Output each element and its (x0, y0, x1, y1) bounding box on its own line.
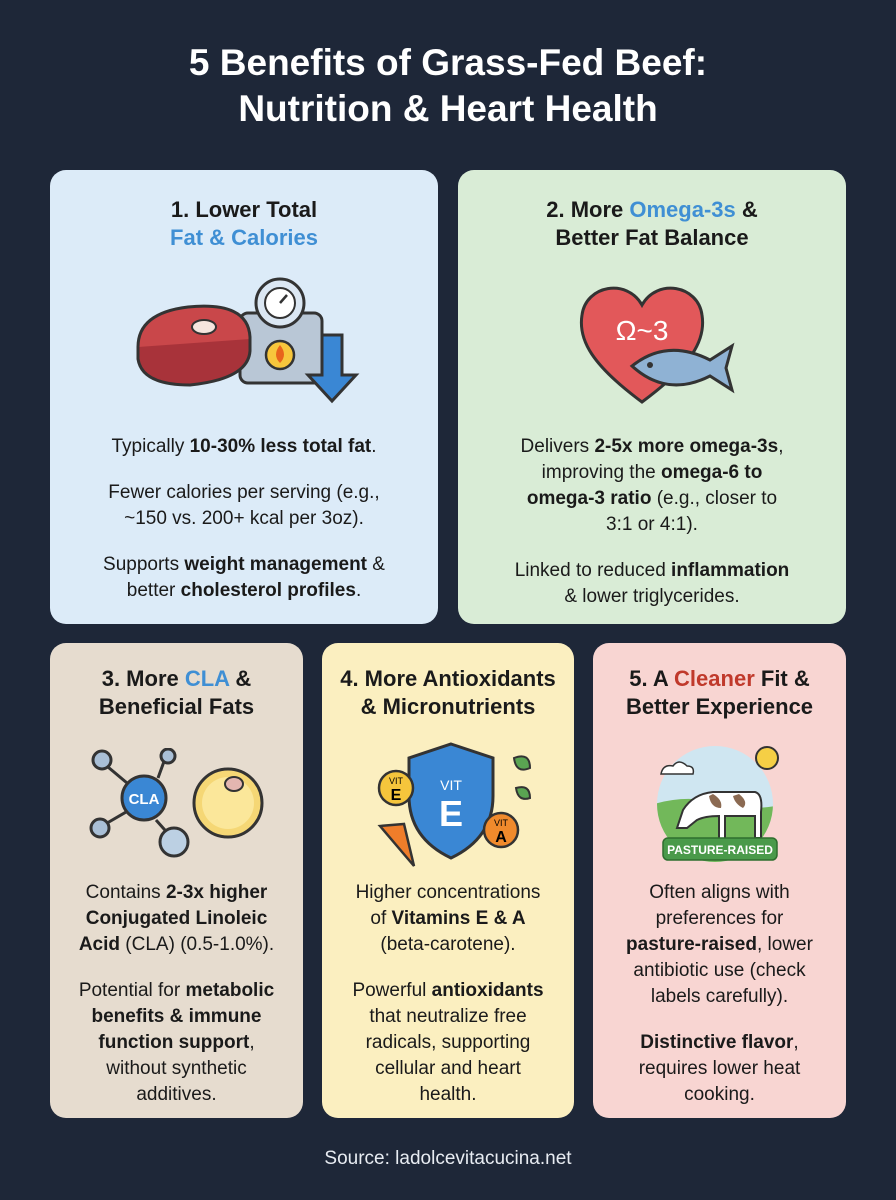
text block 1: ~150 vs. 200+ kcal per 3oz). (124, 508, 364, 529)
text block 1: better cholesterol profiles. (127, 580, 361, 601)
text block 1 (103, 436, 385, 601)
text block 5: pasture-raised, lower (626, 934, 813, 955)
text block 2 (515, 436, 789, 607)
text block 3: without synthetic (106, 1058, 247, 1079)
source: Source: ladolcevitacucina.net (324, 1148, 572, 1169)
panel: CLA (50, 643, 303, 1118)
text block 5: requires lower heat (639, 1058, 800, 1079)
icon: vitamin shield: VIT (440, 777, 462, 793)
heading 5: Better Experience (626, 694, 813, 719)
title: Nutrition & Heart Health (238, 88, 658, 129)
text block 5: preferences for (656, 908, 783, 929)
panel: cleaner fit (593, 643, 846, 1118)
text block 4: health. (419, 1084, 477, 1105)
heading 4: & Micronutrients (361, 694, 535, 719)
heading 2 (546, 197, 758, 250)
heading 2: Better Fat Balance (555, 225, 749, 250)
text block 4: Higher concentrations (356, 882, 540, 903)
icon: CLA molecule (90, 748, 264, 858)
text block 2: Delivers 2-5x more omega-3s, (521, 436, 783, 457)
icon: heart with fish (580, 286, 734, 404)
text block 3: additives. (136, 1084, 217, 1105)
panel: antioxidants (322, 643, 574, 1118)
title: 5 Benefits of Grass-Fed Beef: (189, 42, 707, 83)
icon: vitamin shield: VIT (389, 776, 403, 786)
panel: lower fat (50, 170, 438, 624)
text block 2: Linked to reduced inflammation (515, 560, 789, 581)
text block 3: Conjugated Linoleic (86, 908, 267, 929)
text block 2: 3:1 or 4:1). (606, 514, 698, 535)
text block 2: omega-3 ratio (e.g., closer to (527, 488, 777, 509)
icon: CLA molecule: CLA (129, 791, 160, 808)
text block 3: benefits & immune (92, 1006, 261, 1027)
heading 4 (340, 666, 556, 719)
text block 1: Supports weight management & (103, 554, 385, 575)
icon: pasture-raised cow: PASTURE-RAISED (667, 843, 773, 857)
heading 1 (170, 197, 318, 250)
icon: vitamin shield (378, 742, 531, 867)
text block 3 (79, 882, 274, 1105)
text block 3: Contains 2-3x higher (86, 882, 267, 903)
heading 5 (626, 666, 813, 719)
heading 3: Beneficial Fats (99, 694, 254, 719)
panel: omega-3 (458, 170, 846, 624)
title (189, 42, 707, 129)
text block 4: that neutralize free (369, 1006, 527, 1027)
icon: vitamin shield: E (439, 793, 463, 834)
text block 5: Distinctive flavor, (640, 1032, 799, 1053)
heading 5: 5. A Cleaner Fit & (629, 666, 810, 691)
heading 2: 2. More Omega-3s & (546, 197, 758, 222)
text block 4: Powerful antioxidants (352, 980, 544, 1001)
text block 2: & lower triglycerides. (564, 586, 740, 607)
icon: vitamin shield: A (495, 829, 507, 846)
text block 4 (352, 882, 544, 1105)
text block 4: radicals, supporting (366, 1032, 530, 1053)
text block 1: Fewer calories per serving (e.g., (108, 482, 380, 503)
text block 3: function support, (98, 1032, 255, 1053)
icon: steak and scale (136, 278, 360, 404)
text block 3: Acid (CLA) (0.5-1.0%). (79, 934, 274, 955)
text block 4: (beta-carotene). (380, 934, 516, 955)
heading 4: 4. More Antioxidants (340, 666, 556, 691)
icon: pasture-raised cow (657, 746, 779, 862)
icon: heart with fish: Ω~3 (616, 315, 668, 346)
heading 1: 1. Lower Total (171, 197, 317, 222)
text block 4: of Vitamins E & A (370, 908, 526, 929)
heading 3: 3. More CLA & (102, 666, 251, 691)
icon: vitamin shield: E (391, 787, 402, 804)
text block 5 (626, 882, 813, 1105)
text block 5: Often aligns with (649, 882, 790, 903)
text block 5: cooking. (684, 1084, 755, 1105)
text block 2: improving the omega-6 to (542, 462, 762, 483)
heading 1: Fat & Calories (170, 225, 318, 250)
icon: vitamin shield: VIT (494, 818, 508, 828)
text block 1: Typically 10-30% less total fat. (111, 436, 377, 457)
heading 3 (99, 666, 254, 719)
text block 4: cellular and heart (375, 1058, 521, 1079)
text block 5: antibiotic use (check (633, 960, 806, 981)
text block 3: Potential for metabolic (79, 980, 274, 1001)
text block 5: labels carefully). (651, 986, 788, 1007)
